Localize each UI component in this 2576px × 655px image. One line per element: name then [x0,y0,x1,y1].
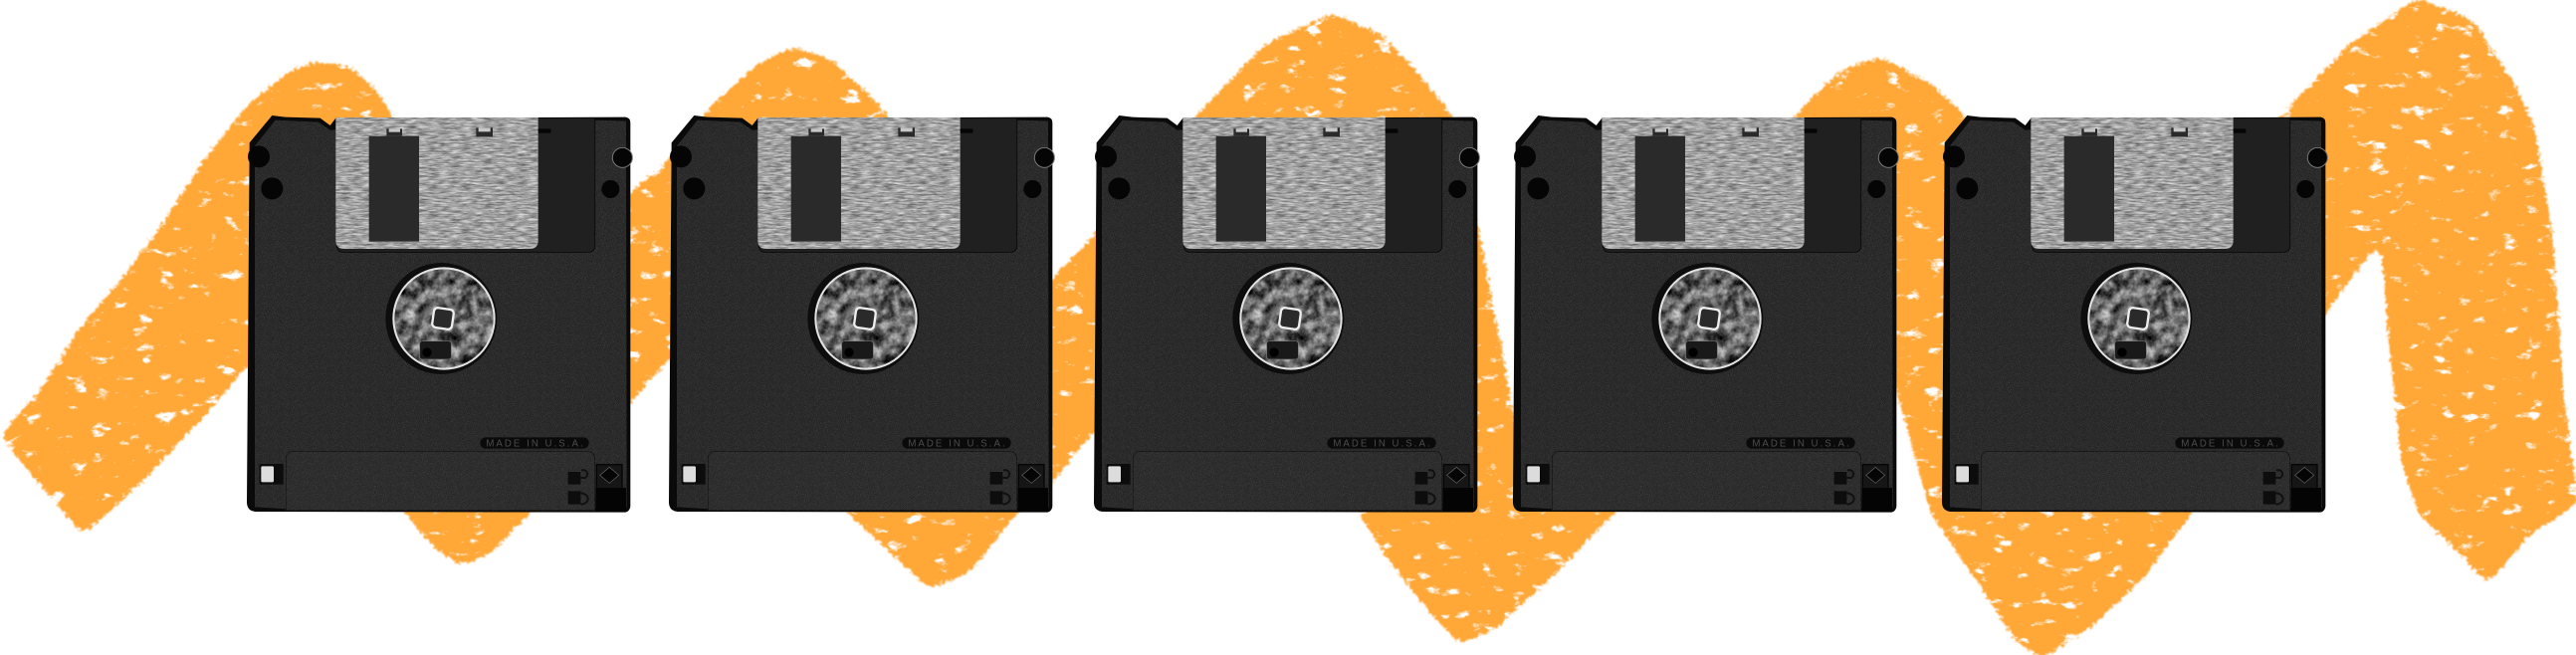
white square hole [260,464,284,485]
centre hub [385,263,497,374]
made in U.S.A. label: MADE IN U.S.A. [908,439,1006,450]
made in U.S.A. label: MADE IN U.S.A. [486,439,584,450]
alignment holes [248,128,632,199]
made in U.S.A. label: MADE IN U.S.A. [1752,439,1850,450]
bottom plate [1133,451,1442,511]
metal shutter with window [757,117,961,249]
floppy disk 5 [1942,115,2327,513]
metal shutter with window [335,117,538,249]
bottom plate [286,451,595,511]
shutter recess [2032,118,2290,252]
made in U.S.A. label: MADE IN U.S.A. [2181,439,2279,450]
lock icons [1415,470,1435,505]
shutter recess [336,118,595,252]
alignment holes [1943,128,2327,199]
centre hub [1651,263,1763,374]
white square hole [1526,464,1550,485]
bottom plate [1981,451,2290,511]
metal shutter with window [1182,117,1386,249]
white square hole [682,464,706,485]
floppy disk 4 [1513,115,1898,513]
alignment holes [670,128,1054,199]
lock icons [2263,470,2283,505]
floppy disk 1 [247,115,632,513]
white square hole [1107,464,1131,485]
centre hub [1232,263,1344,374]
write-protect switch [595,465,626,512]
write-protect switch [1861,465,1892,512]
disk body [1513,115,1896,513]
alignment holes [1514,128,1898,199]
write-protect switch [2290,465,2321,512]
bottom plate [708,451,1017,511]
lock icons [568,470,588,505]
centre hub [2080,263,2192,374]
metal shutter with window [1602,117,1805,249]
made in U.S.A. label: MADE IN U.S.A. [1333,439,1431,450]
disk body [247,115,630,513]
shutter recess [758,118,1017,252]
metal shutter with window [2031,117,2234,249]
bottom plate [1552,451,1861,511]
white square hole [1955,464,1979,485]
floppy disk 3 [1094,115,1479,513]
shutter recess [1603,118,1861,252]
write-protect switch [1017,465,1048,512]
disk body [1942,115,2325,513]
disk body [1094,115,1477,513]
lock icons [1834,470,1854,505]
alignment holes [1095,128,1479,199]
disk body [669,115,1052,513]
shutter recess [1183,118,1442,252]
write-protect switch [1442,465,1473,512]
floppy disk 2 [669,115,1054,513]
lock icons [990,470,1010,505]
centre hub [807,263,919,374]
